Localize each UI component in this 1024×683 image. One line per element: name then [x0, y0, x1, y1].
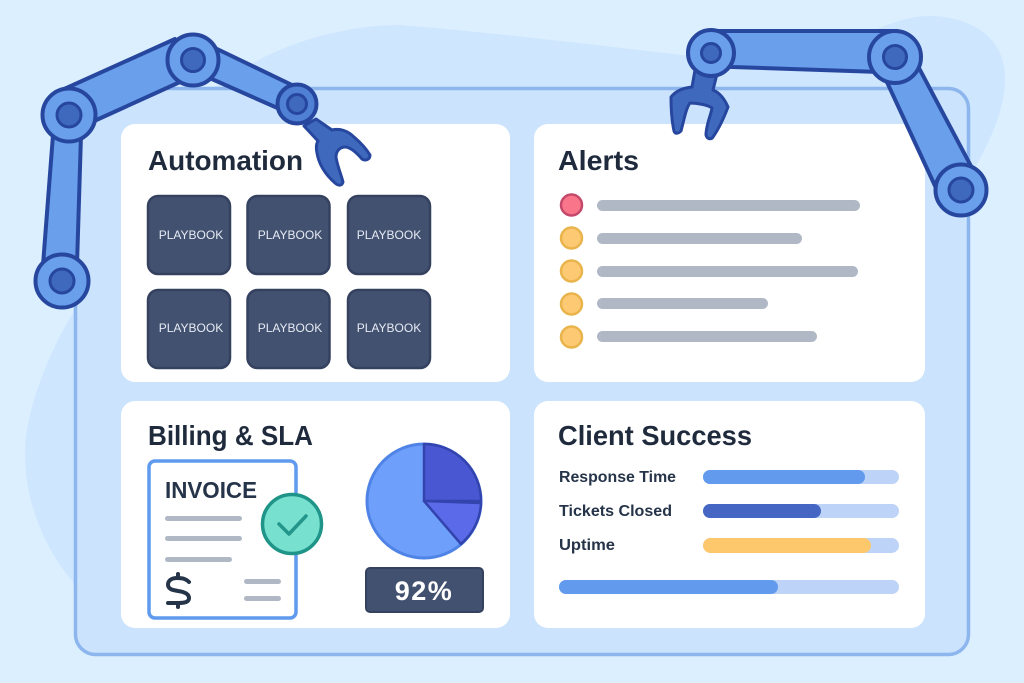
joint: wrist: [278, 84, 316, 124]
metric: uptime: [559, 537, 899, 554]
alert row 3: [561, 260, 858, 282]
panel: automation: [121, 124, 510, 382]
arm segment: lower: [43, 135, 81, 265]
arm segment: down: [886, 68, 972, 188]
joint: top: [168, 34, 218, 86]
alert rows: [561, 194, 860, 348]
tile 5: [248, 290, 330, 368]
panel: billing and SLA: [121, 401, 510, 628]
metric: tickets closed: [559, 503, 899, 520]
alert row 5: [561, 326, 817, 348]
icon: approved check badge: [262, 494, 322, 554]
invoice document: INVOICE: [165, 477, 257, 503]
arm segment: top: [708, 31, 897, 72]
heading: automation: Automation: [148, 145, 303, 176]
tile 4: [148, 290, 230, 368]
stat: 92 percent: [366, 568, 483, 612]
tile 3: PLAYBOOK: [357, 228, 421, 242]
main dashboard frame: [76, 88, 968, 654]
joint: gripper mount: [688, 30, 734, 76]
alert row 1: [561, 194, 860, 216]
tile 1: PLAYBOOK: [159, 228, 223, 242]
panel: client success: [534, 401, 925, 628]
stat: 92 percent: 92%: [395, 576, 453, 606]
overall progress bar: [559, 580, 899, 594]
alert row 4: [561, 294, 768, 314]
joint: base: [936, 164, 986, 216]
robot arm: right: [671, 30, 986, 216]
tile 3: [348, 196, 430, 274]
playbook tiles: [148, 196, 430, 368]
invoice document: [149, 461, 296, 618]
pie chart: [367, 444, 481, 558]
tile 4: PLAYBOOK: [159, 321, 223, 335]
metric: tickets closed: Tickets Closed: [559, 503, 672, 520]
tile 6: [348, 290, 430, 368]
joint: shoulder: [869, 31, 921, 83]
heading: alerts: Alerts: [558, 145, 639, 176]
metric: response time: [559, 469, 899, 486]
alert row 2: [561, 228, 802, 248]
metric: uptime: Uptime: [559, 537, 615, 554]
icon: dollar sign: [168, 574, 189, 607]
tile 2: [248, 196, 330, 274]
metric: response time: Response Time: [559, 469, 676, 486]
heading: billing: Billing & SLA: [148, 420, 313, 451]
joint: elbow left: [42, 88, 96, 142]
heading: client success: Client Success: [558, 420, 752, 451]
tile 5: PLAYBOOK: [258, 321, 322, 335]
panel: alerts: [534, 124, 925, 382]
arm segment: forearm: [205, 48, 292, 110]
tile 6: PLAYBOOK: [357, 321, 421, 335]
gripper: [304, 119, 370, 185]
tile 1: [148, 196, 230, 274]
gripper: [671, 70, 728, 139]
arm segment: upper: [62, 39, 180, 122]
robot arm: left: [36, 34, 370, 308]
tile 2: PLAYBOOK: [258, 228, 322, 242]
joint: base: [36, 254, 88, 308]
